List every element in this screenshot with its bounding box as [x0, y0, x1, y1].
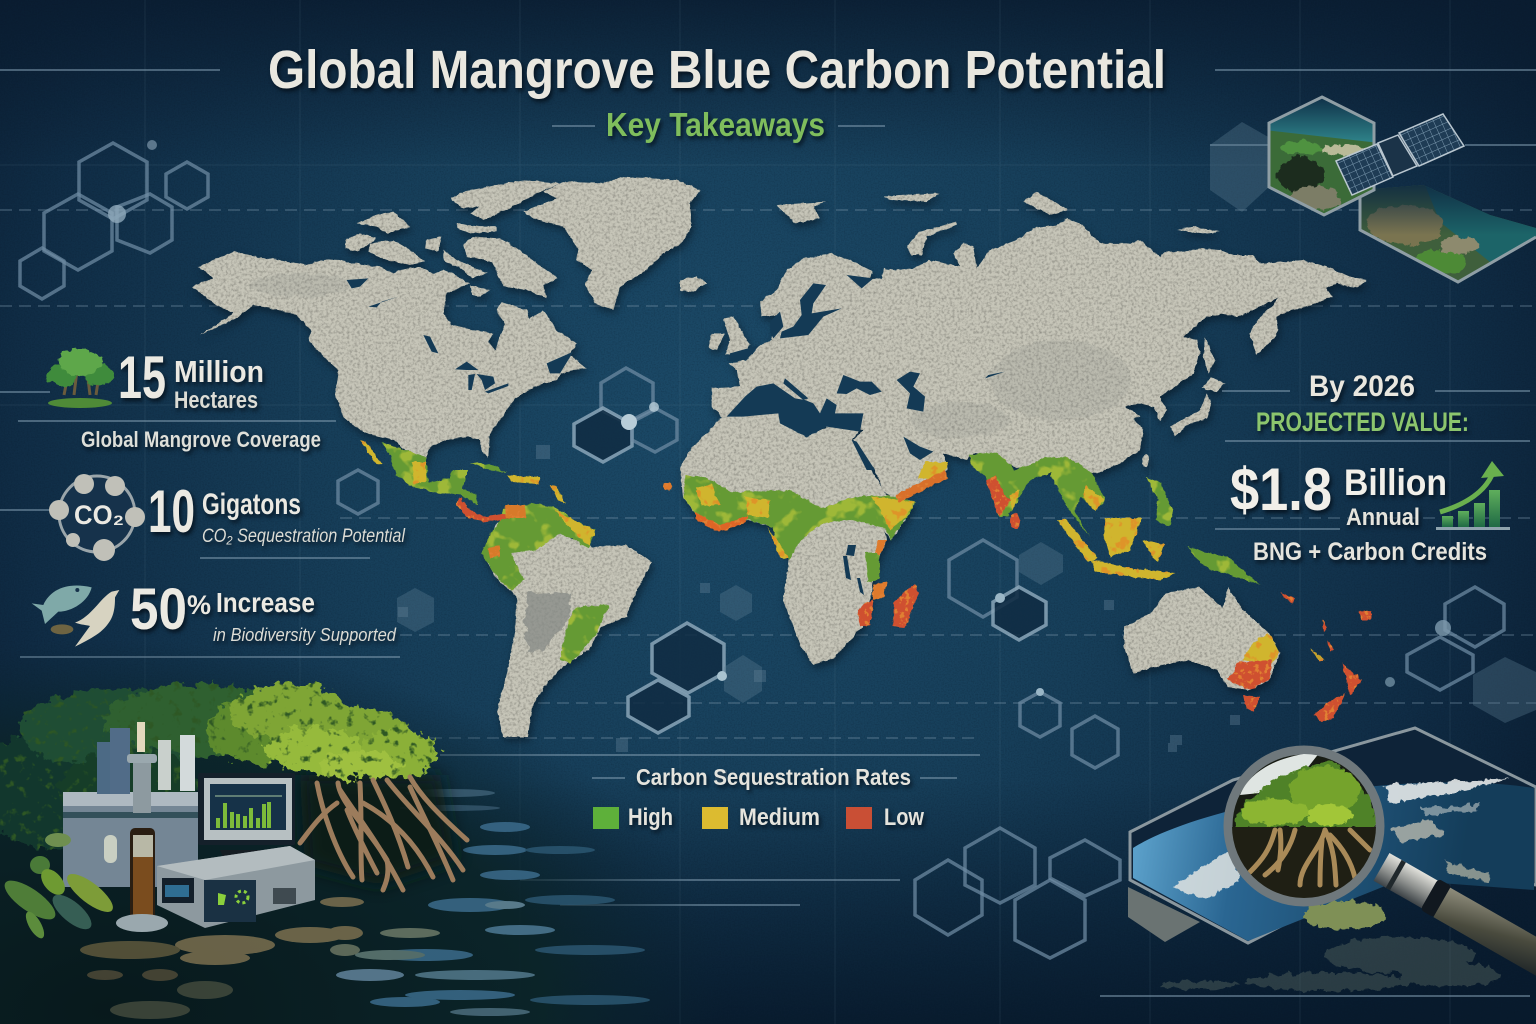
mud and stone patches — [80, 897, 440, 1019]
stat: mangrove coverage: 15 — [118, 344, 166, 411]
hexagon network: indian ocean — [949, 540, 1118, 768]
sediment core tube — [116, 722, 168, 932]
icon: growth chart — [1436, 461, 1510, 530]
icon: CO2 ring: CO₂ — [74, 500, 124, 530]
stat: biodiversity: % — [187, 590, 211, 620]
legend item: medium — [702, 804, 820, 831]
legend item: high — [593, 804, 673, 831]
low sequestration (red) regions — [456, 470, 1372, 722]
legend item: low — [846, 804, 924, 831]
world map — [192, 177, 1372, 737]
image hexagon one — [1265, 95, 1380, 220]
prop roots — [300, 777, 467, 890]
magnifier handle — [1373, 851, 1536, 979]
mangrove scene — [0, 684, 650, 1019]
hexagon network: top centre faint — [1210, 122, 1270, 212]
satellite — [1336, 114, 1464, 195]
magnifier lens — [1228, 750, 1380, 902]
high sequestration (green) regions — [381, 442, 1260, 663]
projected value panel: Annual — [1346, 504, 1420, 531]
stat: mangrove coverage: Global Mangrove Coverage — [81, 427, 321, 452]
stat: CO2 sequestration: Gigatons — [202, 488, 301, 521]
projected value panel: $1.8 — [1230, 456, 1332, 523]
hexagon network: central atlantic — [338, 368, 752, 632]
monitor with chart — [198, 773, 295, 862]
hexagon network: south atlantic — [628, 623, 762, 733]
earth from space hexagon — [1128, 728, 1536, 943]
land tonal patches — [250, 273, 1130, 438]
faded land below — [1160, 937, 1500, 991]
stat: mangrove coverage: Million — [174, 354, 264, 389]
icon: tree — [46, 348, 113, 408]
foreground leaves — [0, 833, 118, 941]
projected value panel: PROJECTED VALUE: — [1256, 407, 1469, 437]
hexagon network: right — [1385, 587, 1536, 723]
projected value panel — [1215, 370, 1530, 566]
medium sequestration (yellow) regions — [360, 440, 1280, 664]
south america — [483, 523, 652, 737]
hexagon network: bottom centre — [915, 828, 1120, 958]
stat: biodiversity: in Biodiversity Supported — [213, 625, 397, 645]
projected value panel: BNG + Carbon Credits — [1253, 538, 1487, 566]
icon: fish — [32, 586, 92, 624]
north america and arctic — [192, 177, 700, 463]
inland seas and lakes — [347, 275, 1005, 595]
australia — [1124, 587, 1280, 690]
projected value panel: By 2026 — [1309, 370, 1415, 403]
legend item: medium: Medium — [739, 804, 820, 831]
stat: mangrove coverage — [46, 344, 321, 452]
hexagon network: top left — [20, 140, 208, 299]
stat: CO2 sequestration: CO₂ Sequestration Potential — [202, 526, 406, 547]
mangrove scene shading — [0, 600, 760, 1024]
root shadow — [300, 775, 455, 885]
stat: biodiversity: Increase — [216, 587, 315, 618]
title: Global Mangrove Blue Carbon Potential — [268, 40, 1166, 100]
water ripples — [336, 789, 650, 1016]
stat: CO2 sequestration — [49, 474, 406, 561]
icon: bird — [51, 590, 119, 647]
eurasia and northern islands — [680, 192, 1367, 498]
legend item: low: Low — [884, 804, 924, 831]
subtitle: Key Takeaways — [606, 106, 825, 143]
icon: CO2 ring — [49, 474, 145, 561]
legend item: high: High — [628, 804, 673, 831]
stat: CO2 sequestration: 10 — [148, 478, 195, 545]
legend: carbon sequestration rates — [592, 764, 957, 831]
earth and magnifier — [1128, 728, 1536, 991]
land masses — [192, 177, 1367, 737]
projected value panel: Billion — [1344, 462, 1447, 503]
analyser base unit — [157, 846, 315, 928]
satellite imagery hexagons — [1265, 95, 1536, 285]
image hexagon two — [1360, 180, 1536, 285]
africa — [680, 413, 915, 665]
back canopy — [0, 684, 295, 850]
front canopy — [205, 684, 438, 779]
stat: biodiversity — [32, 577, 397, 647]
soil and chamber unit — [63, 728, 198, 887]
legend: carbon sequestration rates: Carbon Sequestration Rates — [636, 764, 911, 790]
stat: biodiversity: 50 — [130, 577, 187, 642]
stat: mangrove coverage: Hectares — [174, 387, 258, 414]
andean grey interior — [524, 592, 572, 652]
